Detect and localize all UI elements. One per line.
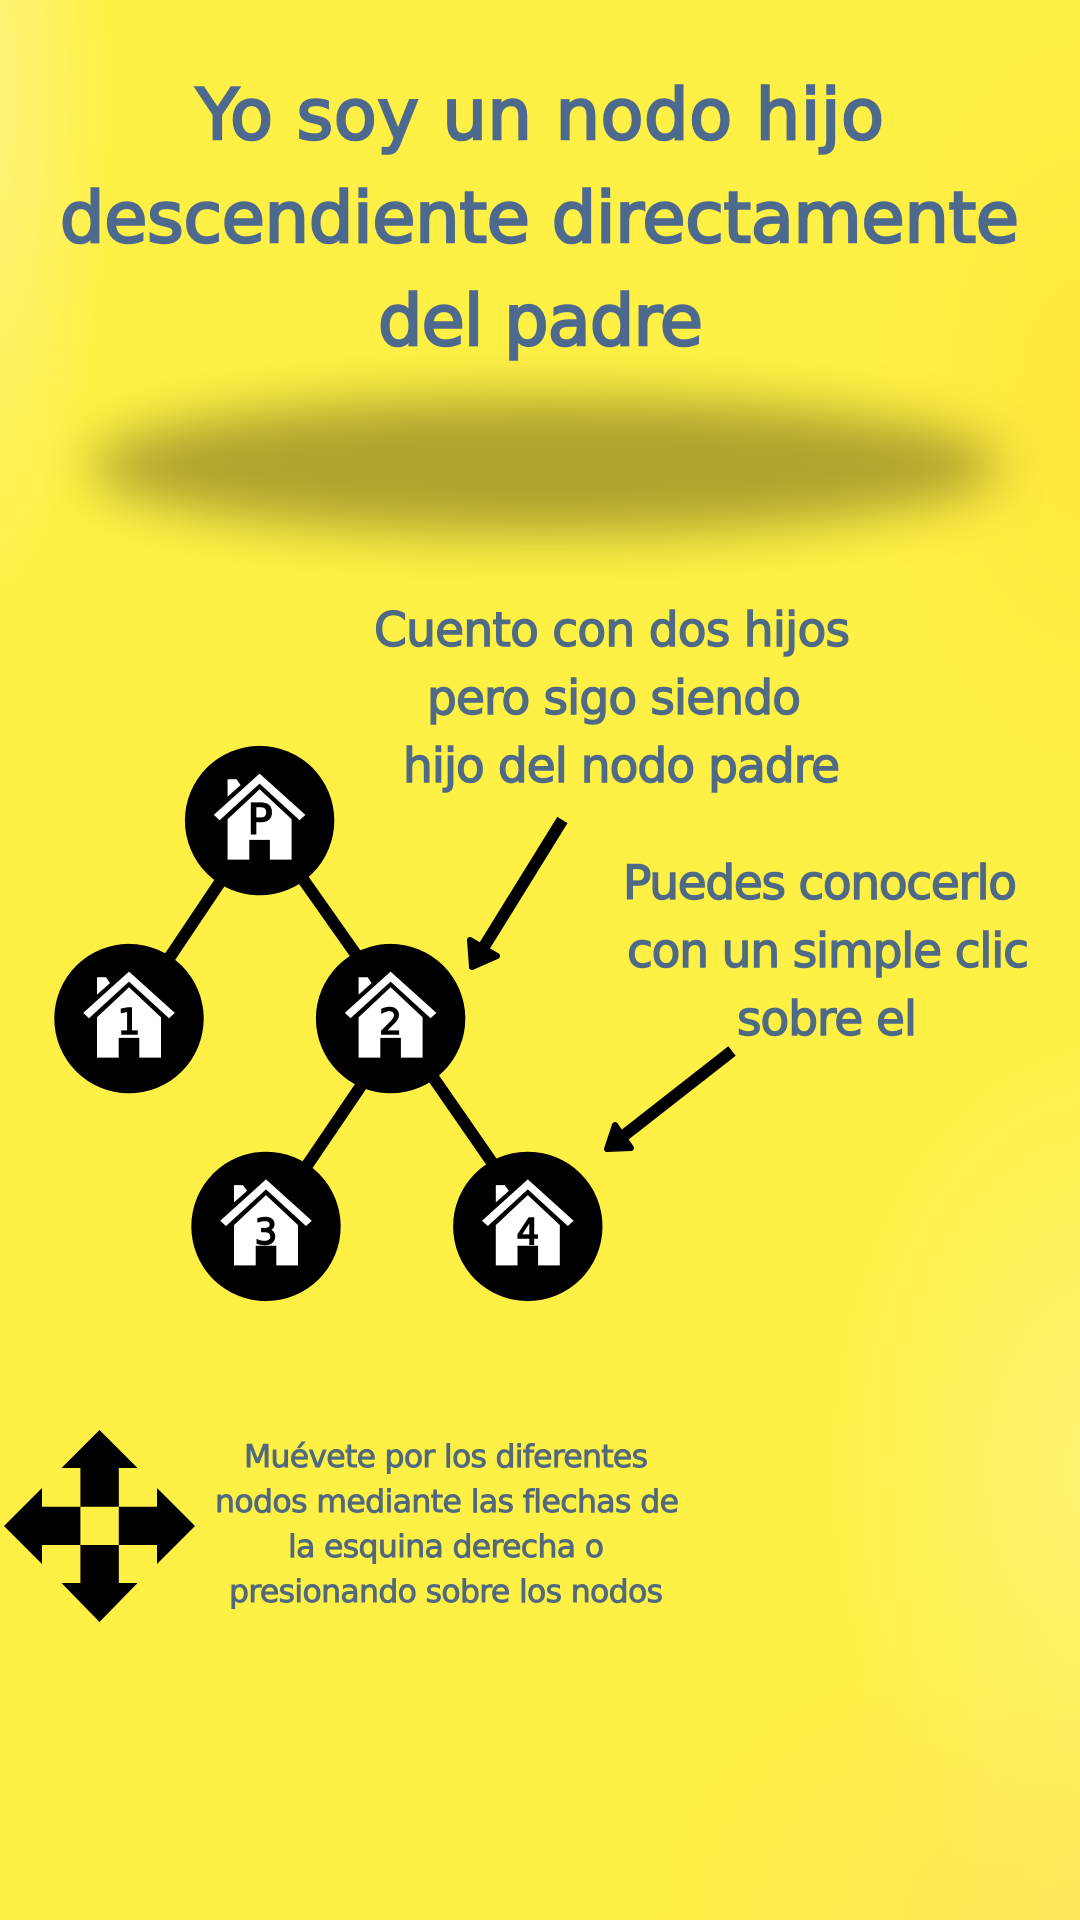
node P: P [247,795,273,844]
text block: two children: pero sigo siendo [427,671,801,726]
node 1: 1 [118,1002,140,1043]
node 3: 3 [255,1212,277,1253]
text block: click to learn more: sobre el [737,992,917,1047]
text block: click to learn more: con un simple clic [627,924,1029,979]
text block: two children [374,603,850,794]
tree diagram [54,746,603,1301]
text block: navigation instructions: nodos mediante las flechas de [215,1484,679,1520]
arrow: pointing to node 4 [607,1051,732,1149]
arrow: pointing to node 2 [470,820,562,967]
node 1 [54,944,204,1093]
node 2 [316,944,465,1093]
title [60,74,1019,362]
icon: four-way navigation arrows [4,1430,195,1622]
node 3 [191,1152,341,1301]
node 4 [453,1152,602,1301]
text block: navigation instructions [215,1439,679,1610]
title: Yo soy un nodo hijo [195,74,884,156]
text block: two children: Cuento con dos hijos [374,603,850,658]
text block: click to learn more: Puedes conocerlo [623,856,1017,911]
text block: two children: hijo del nodo padre [403,739,840,794]
text block: navigation instructions: Muévete por los diferentes [244,1439,648,1475]
title: del padre [378,280,703,362]
node 4: 4 [516,1212,539,1253]
node P [185,746,334,895]
text block: navigation instructions: la esquina derecha o [288,1529,604,1565]
title: descendiente directamente [60,177,1019,259]
text block: click to learn more [623,856,1029,1047]
node 2: 2 [379,1002,402,1043]
text block: navigation instructions: presionando sobre los nodos [229,1574,663,1610]
shadow: blurred dark ellipse [90,398,1000,534]
